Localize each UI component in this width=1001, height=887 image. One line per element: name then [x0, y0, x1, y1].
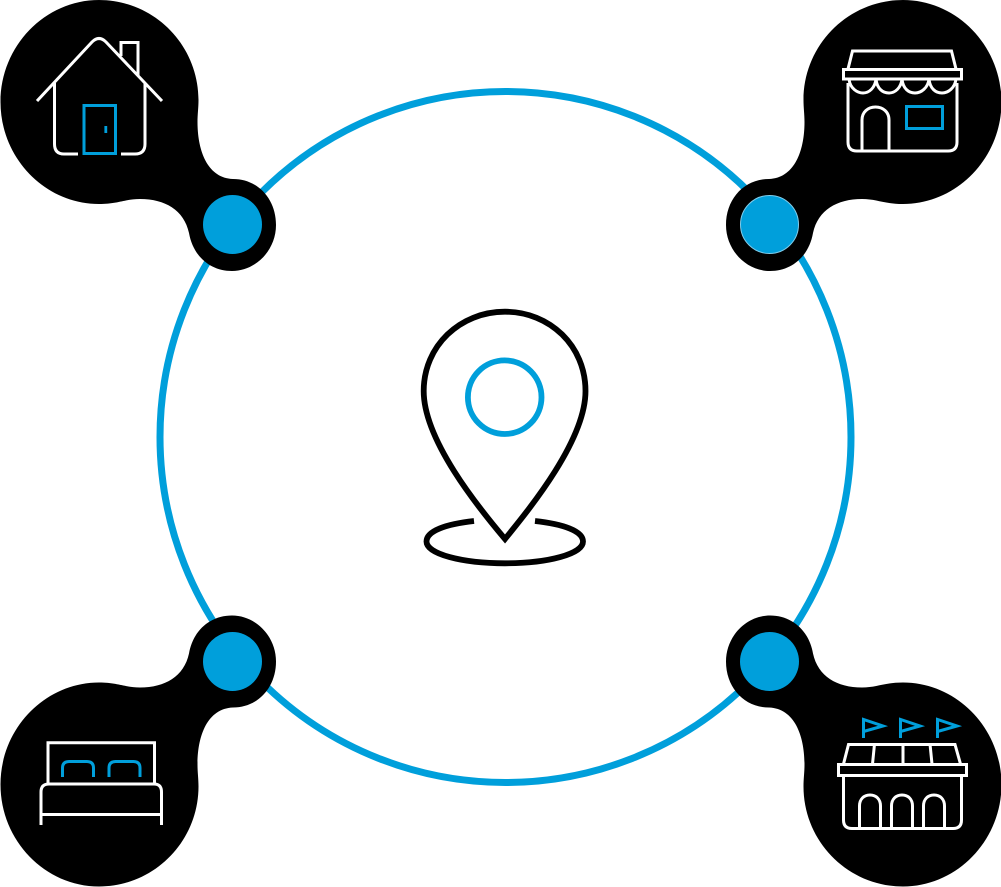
node: top left home — [0, 0, 276, 271]
node: bottom right market — [726, 616, 1001, 886]
icon: bed — [41, 743, 162, 825]
central blue ring — [160, 92, 851, 782]
icon: shop — [844, 51, 962, 151]
node: bottom left bed — [0, 616, 276, 886]
icon: location pin — [424, 312, 586, 563]
icon: house — [37, 38, 162, 154]
node: top right shop — [726, 0, 1001, 271]
icon: market with flags — [838, 720, 966, 828]
